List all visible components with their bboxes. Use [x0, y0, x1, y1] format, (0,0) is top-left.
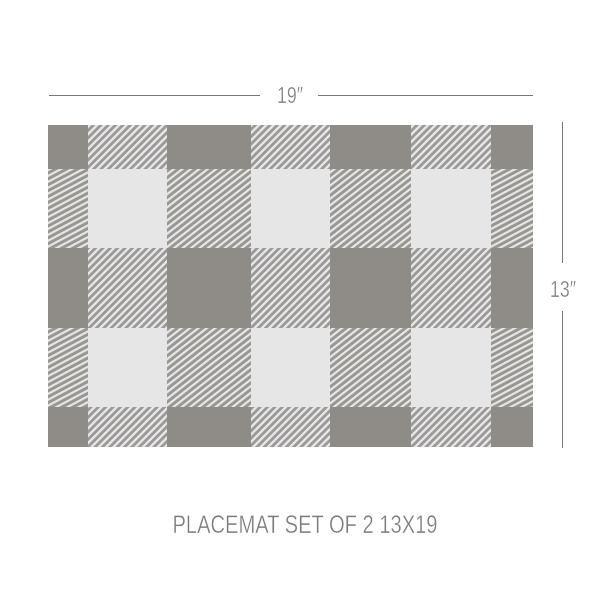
third row squares: [48, 248, 533, 328]
height dimension: 13 inches: 13″: [550, 276, 576, 302]
width dimension: 19 inches: 19″: [277, 82, 303, 108]
fourth row squares: [48, 328, 533, 407]
second row squares: [48, 169, 533, 248]
placemat: buffalo check: [48, 125, 533, 447]
top row squares: [48, 125, 533, 169]
base: [48, 125, 533, 447]
caption: PLACEMAT SET OF 2 13X19: [172, 511, 438, 539]
bottom row squares: [48, 407, 533, 447]
